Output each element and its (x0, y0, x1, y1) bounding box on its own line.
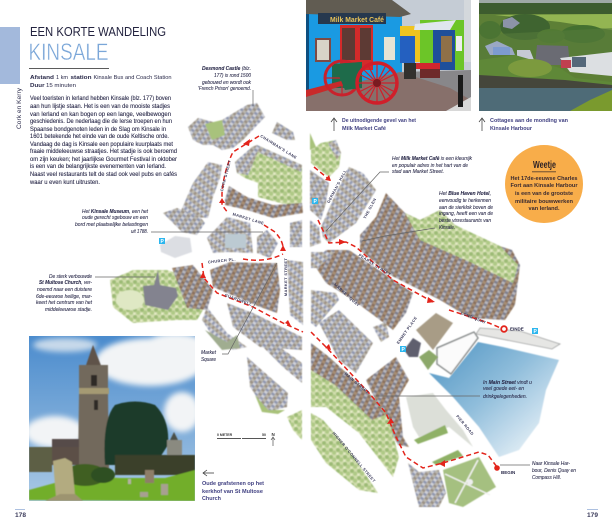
intro text: van Ierland en kan bogen op een lange, veelbewogen (30, 111, 171, 118)
title: EEN KORTE WANDELING (30, 25, 166, 39)
caption: café (331, 118, 416, 132)
fact circle: Fort aan Kinsale Harbour (510, 183, 578, 189)
caption: gravestones (202, 470, 264, 502)
caption: cottages: Cottages aan de monding van (490, 118, 568, 124)
photo: Milk Market Café: Milk Market Café (330, 17, 384, 24)
parking icons right: P (314, 199, 318, 205)
intro text: om zijn keuken; het jaarlijkse Gourmet Festival in oktober (30, 156, 178, 163)
route facts (30, 75, 172, 89)
callout: Market Square: Market (201, 350, 217, 356)
callout: Desmond Castle: 'French Prison' genoemd. (198, 86, 251, 92)
photo: St Multose Church (25, 333, 205, 501)
street labels left (208, 133, 298, 307)
callout: Blue Haven Hotel: beste visrestaurants van (439, 218, 491, 224)
chapter label: Cork en Kerry (16, 87, 23, 129)
scale bar and north arrow: 0 METER (217, 433, 233, 437)
callout: Market Square: Square (201, 357, 216, 363)
building blocks left (110, 103, 303, 440)
callout: Blue Haven Hotel: eenvoudig te herkennen (439, 198, 491, 204)
street labels right (326, 168, 487, 484)
title: KINSALE (28, 39, 108, 66)
callout: Kinsale Museum: oude gerecht sgebouw en een (82, 215, 148, 221)
street labels right: MAIN STREET (344, 371, 371, 395)
street labels right: PIER ROAD (455, 414, 475, 436)
start and end markers: EINDE (510, 326, 524, 332)
callout: Kinsale Museum: bord met plaatselijke belastingen (75, 222, 148, 228)
start and end markers (494, 326, 524, 475)
fact circle: militaire bouwwerken (515, 199, 574, 205)
callout: St Multose Church (36, 274, 155, 313)
intro text: Naast veel restaurants telt de stad ook veel pubs en cafés (30, 171, 178, 178)
scale bar and north arrow: 50 (262, 433, 266, 437)
scale bar and north arrow (217, 432, 275, 446)
start and end markers: BEGIN (501, 470, 515, 475)
scale bar and north arrow: N (272, 432, 275, 437)
street labels left: GUARDWELL (224, 292, 253, 307)
map: right page (310, 133, 560, 507)
callout: Blue Haven Hotel: Kinsale. (439, 225, 455, 231)
street labels right: EMMET PLACE (395, 315, 418, 345)
route facts: station (70, 75, 92, 81)
page number 178 (15, 509, 26, 519)
callout: Kinsale Museum: Het Kinsale Museum, een het (82, 209, 149, 215)
callout: St Multose Church: keert het centrum van het (36, 300, 93, 306)
callout: Desmond Castle (198, 66, 253, 106)
callout: Main Street: veel goede eet- en (483, 386, 524, 392)
callout: Kinsale Harbour: bour, Denis Quay en (532, 468, 576, 474)
street labels right: MARKET QUAY (333, 282, 361, 308)
photo: Milk Market Café (306, 0, 471, 111)
intro text: geschiedenis. De nederlaag die de Ierse troepen en hun (30, 118, 172, 125)
fact circle (505, 145, 583, 223)
callout: Main Street (376, 380, 532, 400)
callout: St Multose Church: St Multose Church, ver- (39, 280, 92, 286)
route facts: Duur (30, 83, 45, 89)
street labels right: HIGHER O'CONNELL STREET (331, 431, 377, 484)
photo: harbour cottages (479, 0, 612, 111)
parking icon: P (160, 239, 164, 245)
callout: St Multose Church: middeleeuwse stadje. (45, 307, 92, 313)
callout: Blue Haven Hotel (362, 191, 493, 241)
parking icon (159, 238, 165, 245)
callout: Milk Market Café (326, 156, 472, 231)
intro text: waar u even kunt uitrusten. (29, 179, 100, 186)
intro text: 1601 betekende het einde van de oude Keltische orde. (30, 133, 169, 140)
route facts: Afstand (30, 75, 54, 81)
callout: Desmond Castle: gebouwd en wordt ook (202, 80, 251, 86)
callout: Kinsale Harbour: Compass Hill. (532, 475, 561, 481)
route right (311, 167, 503, 468)
street labels right: THE GLEN (362, 197, 377, 220)
parking icons right: P (534, 329, 538, 335)
street labels right: PEARSE STREET (358, 252, 392, 277)
map: left page (110, 103, 303, 440)
page number 178: 178 (15, 512, 26, 519)
street labels left: MARKET STREET (283, 258, 288, 296)
caption: gravestones: Oude grafstenen op het (202, 481, 264, 487)
intro text (29, 95, 178, 186)
parking icons right: P (402, 347, 406, 353)
caption: café: De uitnodigende gevel van het (342, 118, 416, 124)
fact circle: Weetje (533, 160, 556, 171)
callout: Kinsale Harbour (500, 461, 576, 481)
callout: Milk Market Café: stad aan Market Street. (392, 169, 444, 175)
page number 179: 179 (587, 512, 598, 519)
callout: Milk Market Café: en populair adres in het hart van de (392, 163, 468, 169)
callout: Desmond Castle: 177) is rond 1500 (214, 73, 251, 79)
callout: Desmond Castle: Desmond Castle (blz. (202, 66, 251, 72)
intro text: Spaanse bondgenoten leden in de Slag om Kinsale in (30, 126, 166, 133)
intro text: Vandaag de dag is Kinsale een populaire kuurplaats met (30, 141, 173, 148)
street labels left: CHURCH PL. (208, 257, 236, 264)
water (429, 342, 559, 457)
street labels left: CHAIRMAN'S LANE (260, 133, 298, 160)
intro text: aan hun lijstje staan. Het is een van de mooiste stadjes (30, 103, 171, 110)
caption: café: Milk Market Café (342, 126, 387, 132)
callout: Kinsale Harbour: Naar Kinsale Har- (532, 461, 570, 467)
callout: St Multose Church: 6de-eeuwse heilige, mar- (36, 294, 92, 300)
callout: Milk Market Café: Het Milk Market Café is een kleurrijk (392, 156, 472, 162)
title (28, 25, 166, 69)
page number 179 (587, 509, 598, 519)
callout: St Multose Church: noemd naar een duistere (37, 287, 92, 293)
street labels left: MARKET LANE (232, 211, 265, 226)
callout: Market Square (201, 263, 277, 363)
callout: Main Street: drinkgelegenheden. (483, 394, 527, 400)
street labels right: GERMAN'S HALL (326, 168, 348, 204)
callout: Kinsale Museum (75, 209, 263, 235)
intro text: fraaie middeleeuwse straatjes. Het stadje is ook beroemd (30, 148, 177, 155)
side tab (0, 27, 20, 84)
fact circle: van Ierland. (528, 206, 560, 212)
callout: Blue Haven Hotel: aan de sierklok boven de (439, 205, 493, 211)
callout: St Multose Church: De sterk verbouwde (49, 274, 92, 280)
route left (200, 136, 303, 332)
route facts: Kinsale Bus and Coach Station (94, 75, 172, 81)
parking icons right (312, 198, 538, 353)
fact circle: Het 17de-eeuwse Charles (510, 176, 578, 182)
building blocks right (310, 133, 520, 507)
caption: gravestones: kerkhof van St Multose (202, 489, 264, 495)
pier (437, 328, 560, 374)
route facts: 1 km (56, 75, 68, 81)
street labels right: LONG QUAY (460, 310, 487, 325)
callout: Blue Haven Hotel: ingang, heeft een van de (439, 211, 493, 217)
intro text: is een van de belangrijkste evenementen van Ierland. (30, 163, 166, 170)
route facts: 15 minuten (46, 83, 76, 89)
callout: Blue Haven Hotel: Het Blue Haven Hotel, (439, 191, 491, 197)
callout: Kinsale Museum: uit 1788. (131, 229, 148, 235)
intro text: Veel toeristen in Ierland hebben Kinsale (blz. 177) boven (30, 95, 171, 102)
caption: gravestones: Church (202, 496, 221, 502)
fact circle: is een van de grootste (515, 191, 573, 197)
caption: cottages: Kinsale Harbour (490, 126, 533, 132)
caption: cottages (479, 118, 568, 132)
callout: Main Street: In Main Street vindt u (483, 380, 532, 386)
street labels left: CORK STREET (219, 159, 232, 192)
